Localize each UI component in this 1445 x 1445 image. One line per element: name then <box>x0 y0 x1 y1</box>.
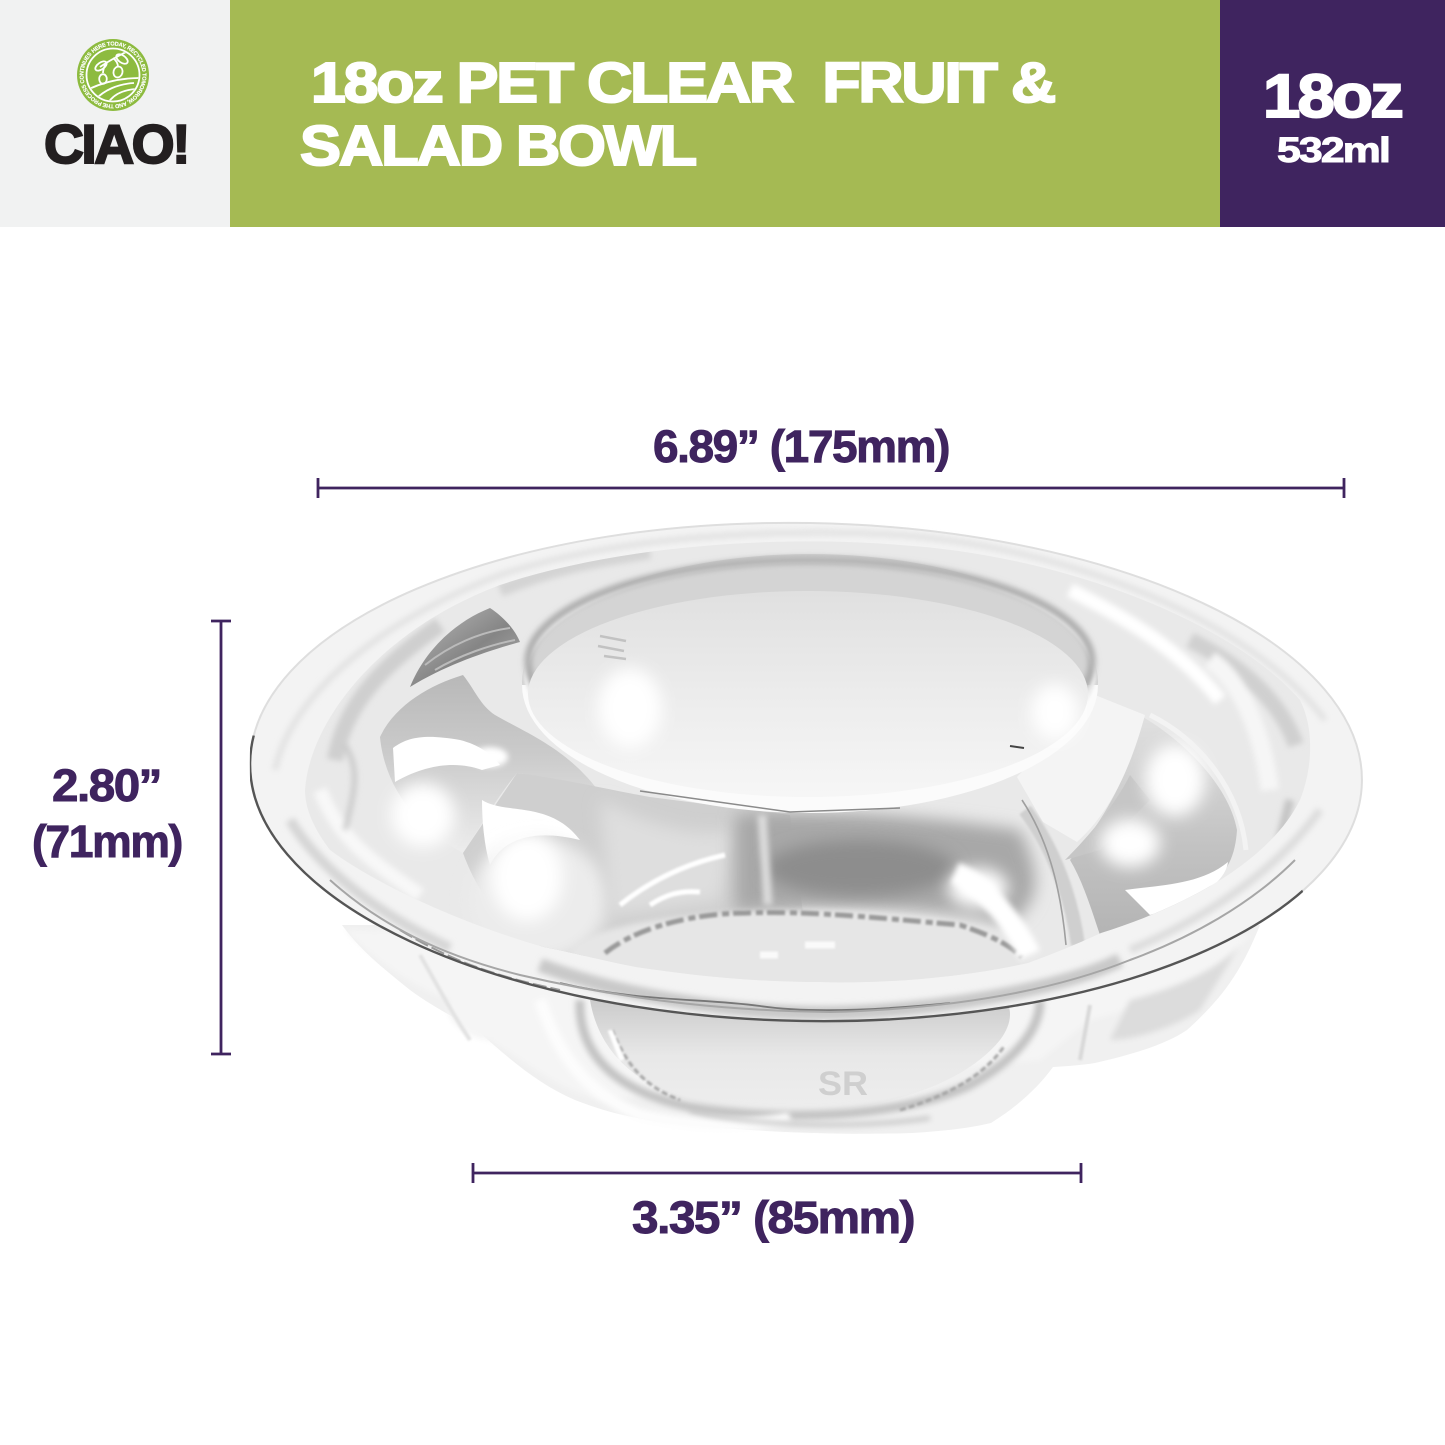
bowl illustration <box>246 513 1366 1134</box>
front rim shading <box>540 960 1120 1013</box>
header: title banner <box>230 0 1220 227</box>
logo wordmark: CIAO! <box>44 113 188 175</box>
embossed mark: SR <box>818 1065 868 1103</box>
left lobe <box>380 675 603 853</box>
rim edge lines <box>250 735 1304 1022</box>
bowl interior <box>305 542 1310 982</box>
capacity oz: 18oz <box>1263 62 1402 130</box>
title: SALAD BOWL <box>300 114 696 178</box>
dimension: base width <box>473 1163 1081 1243</box>
bowl rim <box>246 513 1366 1031</box>
label: (71mm) <box>32 816 182 867</box>
lid slope streaks <box>320 552 1296 895</box>
label <box>32 760 182 867</box>
label: 3.35” (85mm) <box>632 1192 914 1243</box>
lower well <box>590 1000 1010 1113</box>
dimension: top width <box>318 421 1344 498</box>
bowl lower body <box>342 925 1260 1134</box>
icon: Ciao round badge: HERE TODAY, RECYCLED TOMORROW, AND THE PROCESS CONTINUES <box>80 42 146 108</box>
dark lid notch <box>410 608 520 687</box>
measure line <box>318 478 1344 498</box>
capacity ml: 532ml <box>1277 131 1389 170</box>
label: 2.80” <box>52 760 161 811</box>
title <box>300 51 1055 178</box>
dimension: height <box>32 621 231 1054</box>
measure line <box>211 621 231 1054</box>
title: 18oz PET CLEAR FRUIT & <box>311 51 1055 115</box>
label: 6.89” (175mm) <box>653 421 949 472</box>
header: logo panel <box>0 0 230 227</box>
center disc <box>522 554 1098 813</box>
measure line <box>473 1163 1081 1183</box>
right lobe <box>1017 695 1246 935</box>
central well shading <box>574 800 1085 965</box>
inner-left lobe <box>463 773 810 965</box>
header: capacity panel <box>1220 0 1445 227</box>
